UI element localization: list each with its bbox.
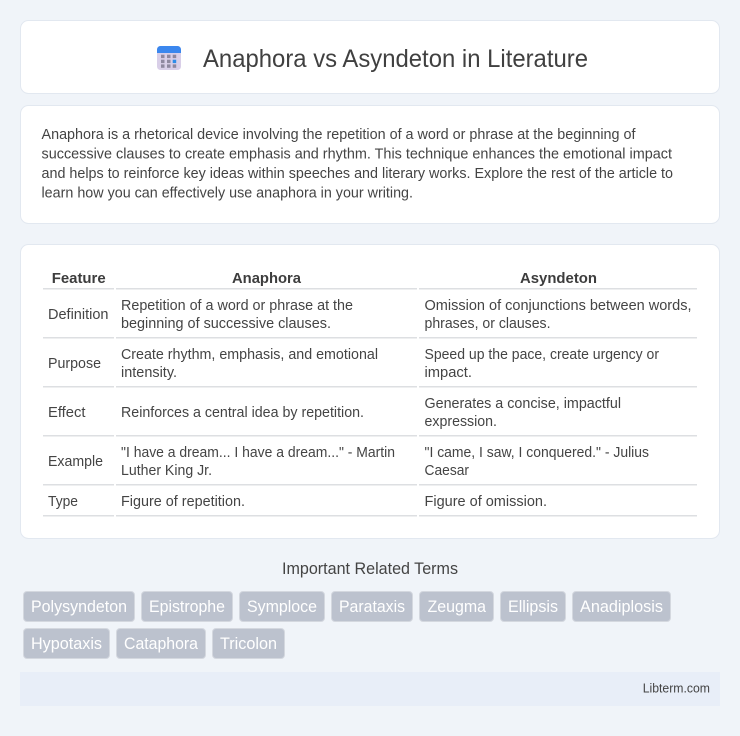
row: effect: expression. [424, 414, 497, 430]
footer [20, 672, 720, 706]
intro text: Anaphora is a rhetorical device involving the repetition of a word or phrase at the beginning of [42, 127, 636, 143]
row: purpose [48, 347, 659, 381]
tag: Cataphora: Cataphora [124, 634, 199, 653]
tag: Polysyndeton [24, 592, 134, 622]
row: purpose: Speed up the pace, create urgency or [424, 347, 659, 363]
tag: Ellipsis [500, 592, 566, 622]
row: purpose: impact. [424, 365, 472, 381]
panel: header [20, 20, 720, 94]
icon: calendar [157, 46, 181, 70]
tag: Hypotaxis [24, 628, 110, 658]
row: example: Caesar [424, 463, 469, 479]
row: type: Figure of omission. [424, 494, 547, 510]
footer: Libterm.com [643, 682, 710, 696]
row: definition: beginning of successive clauses. [121, 316, 331, 332]
row: example: Example [48, 454, 103, 470]
row: purpose: intensity. [121, 365, 177, 381]
row: definition: phrases, or clauses. [424, 316, 550, 332]
row: effect: Generates a concise, impactful [424, 396, 621, 412]
tag: Zeugma: Zeugma [428, 597, 487, 616]
row: effect: Reinforces a central idea by repetition. [121, 405, 364, 421]
tag: Anadiplosis: Anadiplosis [580, 597, 663, 616]
intro text: learn how you can effectively use anaphora in your writing. [42, 186, 413, 202]
title: Anaphora vs Asyndeton in Literature [203, 45, 588, 73]
heading: related terms: Important Related Terms [282, 560, 458, 578]
panel: introduction [20, 106, 720, 224]
panel: comparison table [20, 244, 720, 538]
intro text [42, 127, 673, 202]
row: purpose: Purpose [48, 356, 101, 372]
tag: Polysyndeton: Polysyndeton [31, 597, 127, 616]
row: effect: Effect [48, 405, 86, 421]
tag: Epistrophe [142, 592, 232, 622]
row: type: Type [48, 494, 78, 510]
row: example: Luther King Jr. [121, 463, 212, 479]
table header [52, 270, 597, 287]
tag: Tricolon: Tricolon [220, 634, 277, 653]
row: example: "I have a dream... I have a dream..." - Martin [121, 445, 395, 461]
related term tags [24, 592, 670, 658]
table header: Feature [52, 270, 106, 287]
tag: Parataxis: Parataxis [339, 597, 405, 616]
row: effect [48, 396, 621, 430]
tag: Anadiplosis [572, 592, 670, 622]
table header: Anaphora [232, 270, 302, 287]
tag: Ellipsis: Ellipsis [508, 597, 558, 616]
tag: Hypotaxis: Hypotaxis [31, 634, 102, 653]
row: definition [48, 298, 692, 332]
row: type: Figure of repetition. [121, 494, 245, 510]
row: definition: Definition [48, 307, 108, 323]
tag: Tricolon [212, 628, 284, 658]
table header: Asyndeton [520, 270, 597, 287]
row: example [48, 445, 649, 479]
tag: Symploce: Symploce [247, 597, 317, 616]
row: example: "I came, I saw, I conquered." - Julius [424, 445, 649, 461]
row: definition: Repetition of a word or phrase at the [121, 298, 353, 314]
tag: Epistrophe: Epistrophe [149, 597, 225, 616]
row: definition: Omission of conjunctions between words, [424, 298, 692, 314]
row: type [48, 494, 547, 510]
tag: Zeugma [420, 592, 494, 622]
tag: Cataphora [116, 628, 206, 658]
tag: Symploce [240, 592, 324, 622]
row: purpose: Create rhythm, emphasis, and emotional [121, 347, 378, 363]
tag: Parataxis [332, 592, 412, 622]
intro text: successive clauses to create emphasis and rhythm. This technique enhances the emotional impact [42, 146, 672, 162]
intro text: and helps to reinforce key ideas within speeches and literary works. Explore the rest of the article to [42, 166, 673, 182]
